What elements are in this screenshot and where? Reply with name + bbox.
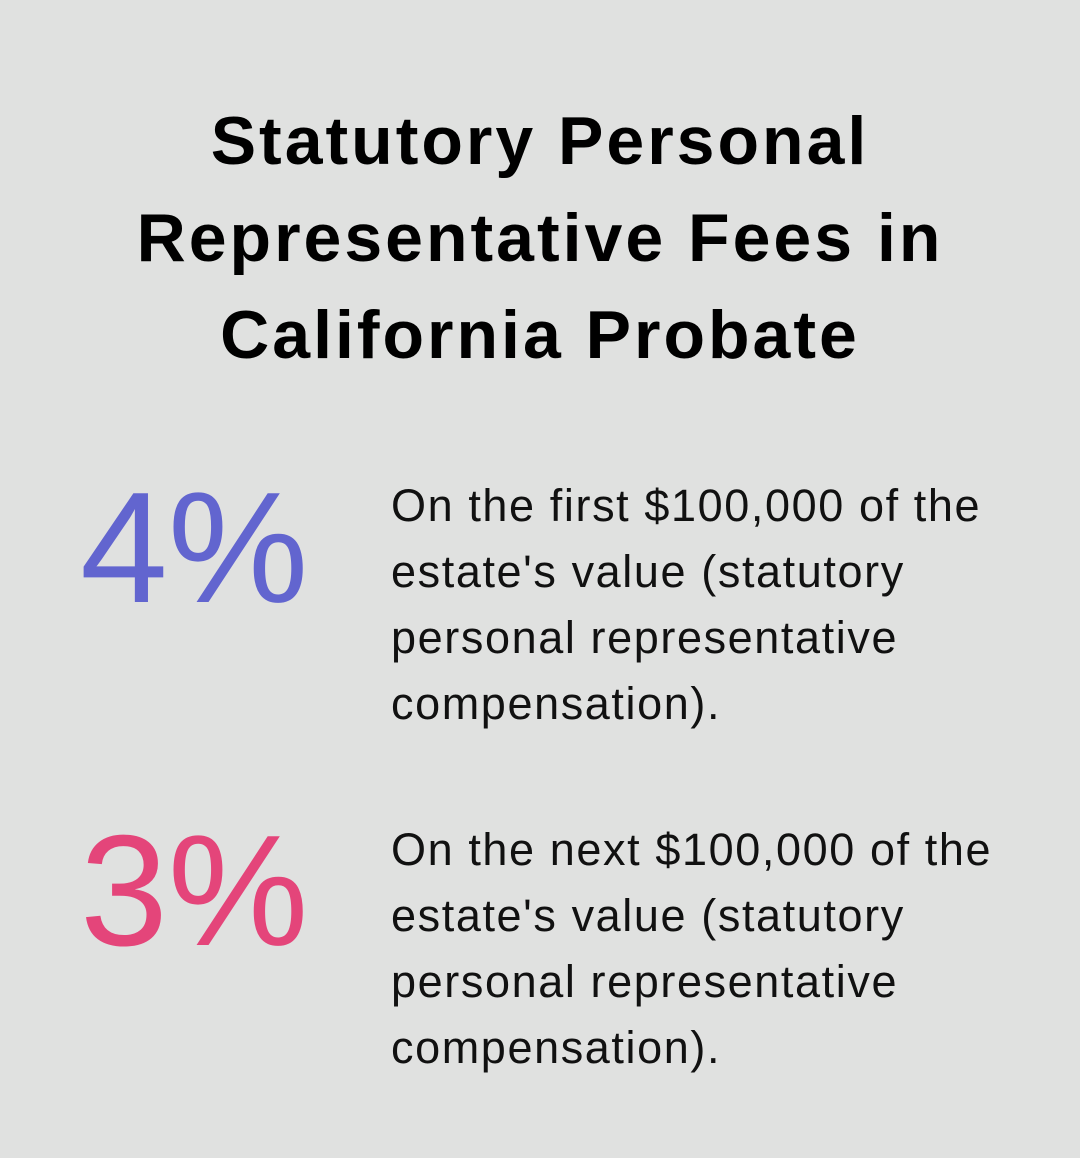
title — [137, 103, 943, 373]
text: 4% description: compensation). — [391, 678, 721, 729]
stat: 4%: 4% — [80, 460, 308, 636]
text: 3% description: personal representative — [391, 956, 898, 1007]
text: 4% description — [391, 480, 981, 729]
title: Representative Fees in — [137, 200, 943, 276]
stat: 3%: 3% — [80, 803, 308, 979]
text: 4% description: estate's value (statutory — [391, 546, 905, 597]
text: 3% description: estate's value (statutory — [391, 890, 905, 941]
title: California Probate — [220, 297, 860, 373]
text: 3% description — [391, 824, 992, 1073]
text: 4% description: personal representative — [391, 612, 898, 663]
text: 3% description: compensation). — [391, 1022, 721, 1073]
text: 4% description: On the first $100,000 of the — [391, 480, 981, 531]
text: 3% description: On the next $100,000 of the — [391, 824, 992, 875]
title: Statutory Personal — [211, 103, 869, 179]
